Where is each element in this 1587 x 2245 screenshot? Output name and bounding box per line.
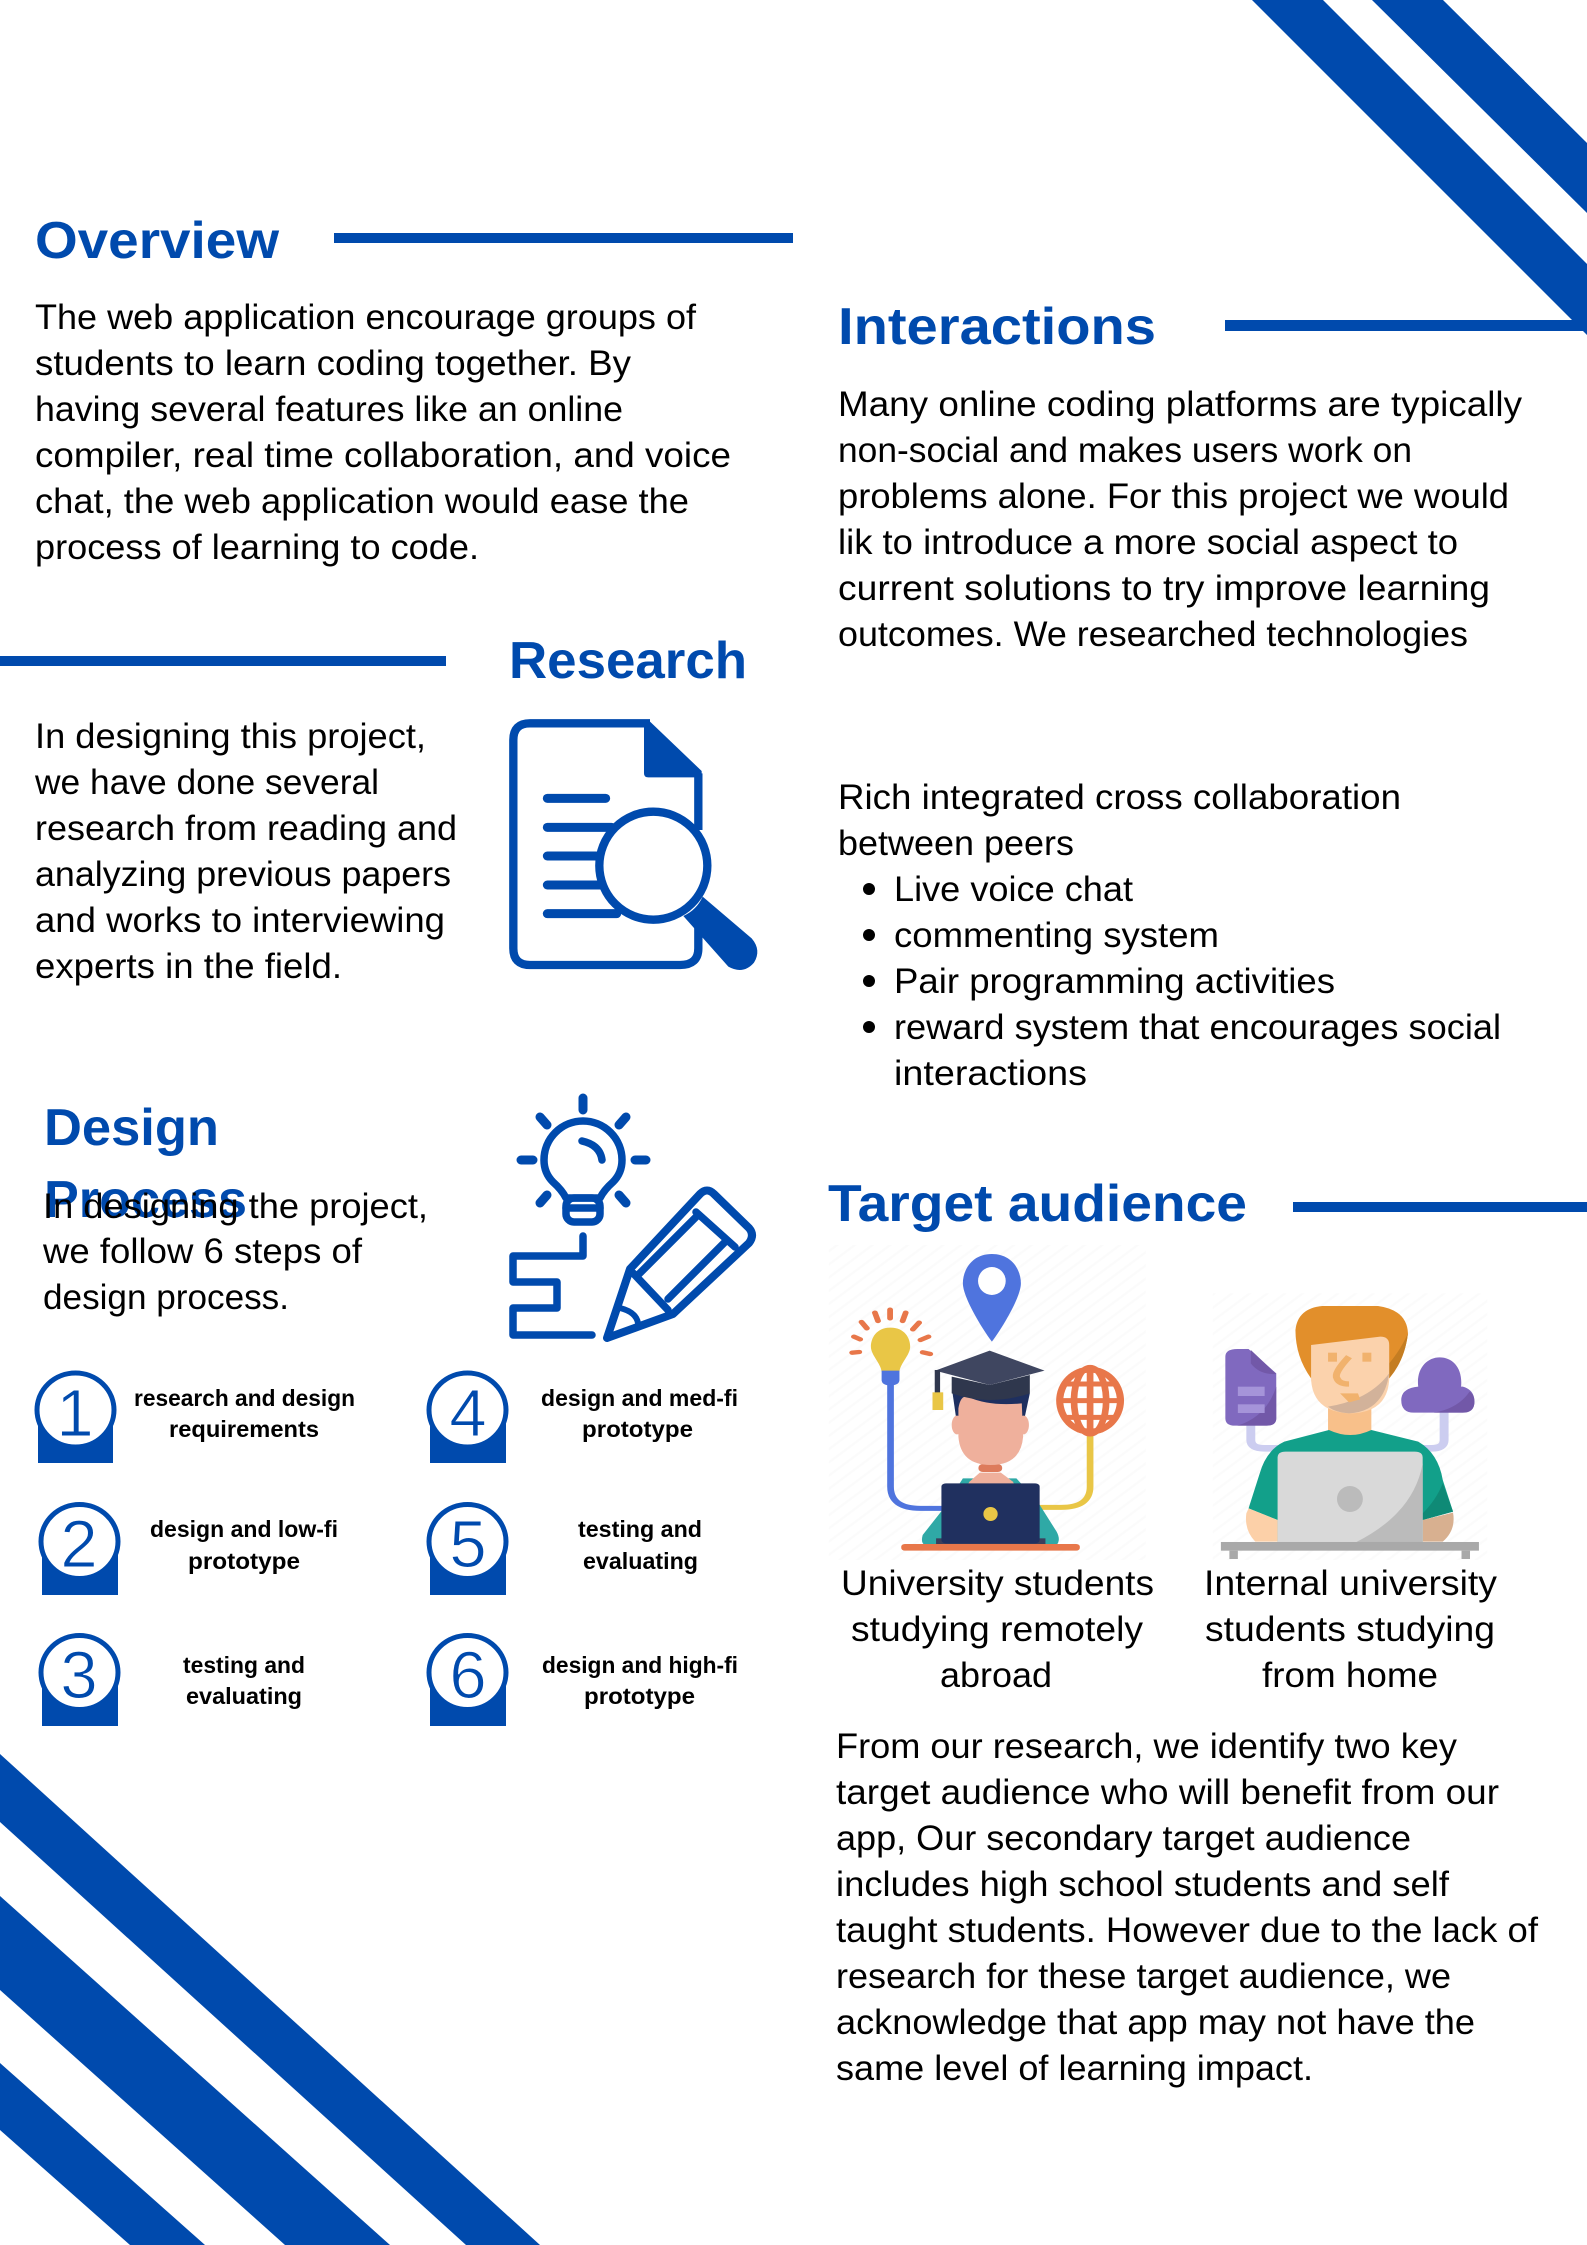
text block: target audience: taught students. However due to the lack of xyxy=(836,1911,1538,1950)
text block: research: experts in the field. xyxy=(35,947,342,986)
step 6: 6 xyxy=(449,1638,487,1713)
caption: university students: University students xyxy=(841,1564,1154,1603)
step 2: design and low-fi xyxy=(150,1516,338,1542)
text block: interactions: Many online coding platforms are typically xyxy=(838,385,1523,424)
step 3: evaluating xyxy=(186,1683,302,1709)
text block: design process xyxy=(42,1187,428,1317)
bullet list: collaboration features xyxy=(863,870,1501,1093)
text block: design process: In designing the project, xyxy=(43,1187,428,1226)
step 5: 5 xyxy=(449,1507,487,1582)
text block: interactions: outcomes. We researched technologies xyxy=(838,615,1468,654)
step 3 xyxy=(41,1636,305,1726)
text block: overview: students to learn coding together. By xyxy=(35,344,632,383)
text block: overview: process of learning to code. xyxy=(35,528,479,567)
step 5: evaluating xyxy=(583,1548,698,1574)
step 2 xyxy=(41,1504,338,1595)
caption: university students xyxy=(841,1564,1154,1695)
bullet list: collaboration features: commenting system xyxy=(894,916,1219,955)
step 4: design and med-fi xyxy=(541,1385,738,1411)
text block: interactions: problems alone. For this project we would xyxy=(838,477,1509,516)
text block: target audience: app, Our secondary target audience xyxy=(836,1819,1411,1858)
caption: internal students xyxy=(1204,1564,1498,1695)
caption: internal students: students studying xyxy=(1205,1610,1495,1649)
text block: target audience: includes high school students and self xyxy=(836,1865,1449,1904)
text block: design process: we follow 6 steps of xyxy=(42,1232,362,1271)
step 3: 3 xyxy=(60,1638,98,1713)
text block: target audience: acknowledge that app may not have the xyxy=(836,2003,1475,2042)
panel: design process xyxy=(37,1098,752,1726)
step 4 xyxy=(429,1373,738,1463)
text block: interactions xyxy=(838,385,1523,654)
text block: research: In designing this project, xyxy=(35,717,426,756)
step 1: requirements xyxy=(169,1416,319,1442)
bottom left diagonal stripes xyxy=(0,1754,540,2245)
text block: research: and works to interviewing xyxy=(35,901,445,940)
text block: research: we have done several xyxy=(34,763,379,802)
text block: interactions: lik to introduce a more social aspect to xyxy=(838,523,1458,562)
text block: target audience xyxy=(836,1727,1538,2088)
heading rule: overview xyxy=(334,233,793,243)
text block: overview: The web application encourage groups of xyxy=(35,298,696,337)
heading: target audience: Target audience xyxy=(828,1175,1247,1233)
text block: overview xyxy=(35,298,731,567)
panel: target audience xyxy=(828,1175,1587,2088)
panel: overview xyxy=(35,212,793,567)
step 1: 1 xyxy=(56,1376,94,1451)
bullet list: collaboration features: reward system that encourages social xyxy=(894,1008,1501,1047)
text block: target audience: From our research, we identify two key xyxy=(836,1727,1458,1766)
heading rule: research xyxy=(0,656,446,666)
caption: internal students: from home xyxy=(1262,1656,1438,1695)
text block: collaboration intro: between peers xyxy=(838,824,1074,863)
step 3: testing and xyxy=(183,1652,305,1678)
step 5: testing and xyxy=(578,1516,702,1542)
text block: overview: having several features like an online xyxy=(35,390,623,429)
bullet list: collaboration features: interactions xyxy=(894,1054,1087,1093)
icon: light bulb and pencil xyxy=(513,1098,752,1338)
bullet list: collaboration features: Pair programming activities xyxy=(894,962,1335,1001)
text block: research: research from reading and xyxy=(35,809,457,848)
step 1 xyxy=(37,1373,355,1463)
text block: interactions: non-social and makes users work on xyxy=(838,431,1412,470)
step 6 xyxy=(429,1636,738,1726)
heading: design process: Process xyxy=(44,1171,247,1229)
heading: interactions: Interactions xyxy=(838,298,1156,356)
text block: collaboration intro xyxy=(838,778,1401,863)
heading: design process: Design xyxy=(44,1099,219,1157)
step 2: 2 xyxy=(60,1507,98,1582)
heading: research: Research xyxy=(509,632,747,690)
step 1: research and design xyxy=(134,1385,355,1411)
text block: target audience: target audience who will benefit from our xyxy=(836,1773,1499,1812)
illustration: internal student at home xyxy=(1213,1293,1487,1560)
step 6: design and high-fi xyxy=(542,1652,738,1678)
step 6: prototype xyxy=(584,1683,695,1709)
bullet list: collaboration features: Live voice chat xyxy=(894,870,1133,909)
step 2: prototype xyxy=(188,1548,300,1574)
text block: research xyxy=(34,717,457,986)
heading: overview: Overview xyxy=(35,212,280,270)
caption: university students: studying remotely xyxy=(851,1610,1144,1649)
panel: research xyxy=(0,632,757,986)
text block: overview: chat, the web application would ease the xyxy=(35,482,689,521)
text block: interactions: current solutions to try improve learning xyxy=(838,569,1490,608)
text block: research: analyzing previous papers xyxy=(35,855,451,894)
text block: overview: compiler, real time collaboration, and voice xyxy=(35,436,731,475)
step 4: 4 xyxy=(449,1376,487,1451)
heading: design process xyxy=(44,1099,247,1229)
text block: collaboration intro: Rich integrated cross collaboration xyxy=(838,778,1401,817)
caption: internal students: Internal university xyxy=(1204,1564,1498,1603)
illustration: remote university student xyxy=(829,1245,1146,1560)
text block: design process: design process. xyxy=(43,1278,289,1317)
top right diagonal stripes xyxy=(1252,0,1587,335)
icon: document with magnifier xyxy=(513,720,757,970)
text block: target audience: research for these target audience, we xyxy=(836,1957,1451,1996)
text block: target audience: same level of learning impact. xyxy=(836,2049,1313,2088)
panel: interactions xyxy=(838,298,1587,1093)
caption: university students: abroad xyxy=(940,1656,1052,1695)
heading rule: interactions xyxy=(1225,320,1587,331)
step 5 xyxy=(429,1504,702,1595)
step 4: prototype xyxy=(582,1416,693,1442)
heading rule: target audience xyxy=(1293,1202,1587,1212)
